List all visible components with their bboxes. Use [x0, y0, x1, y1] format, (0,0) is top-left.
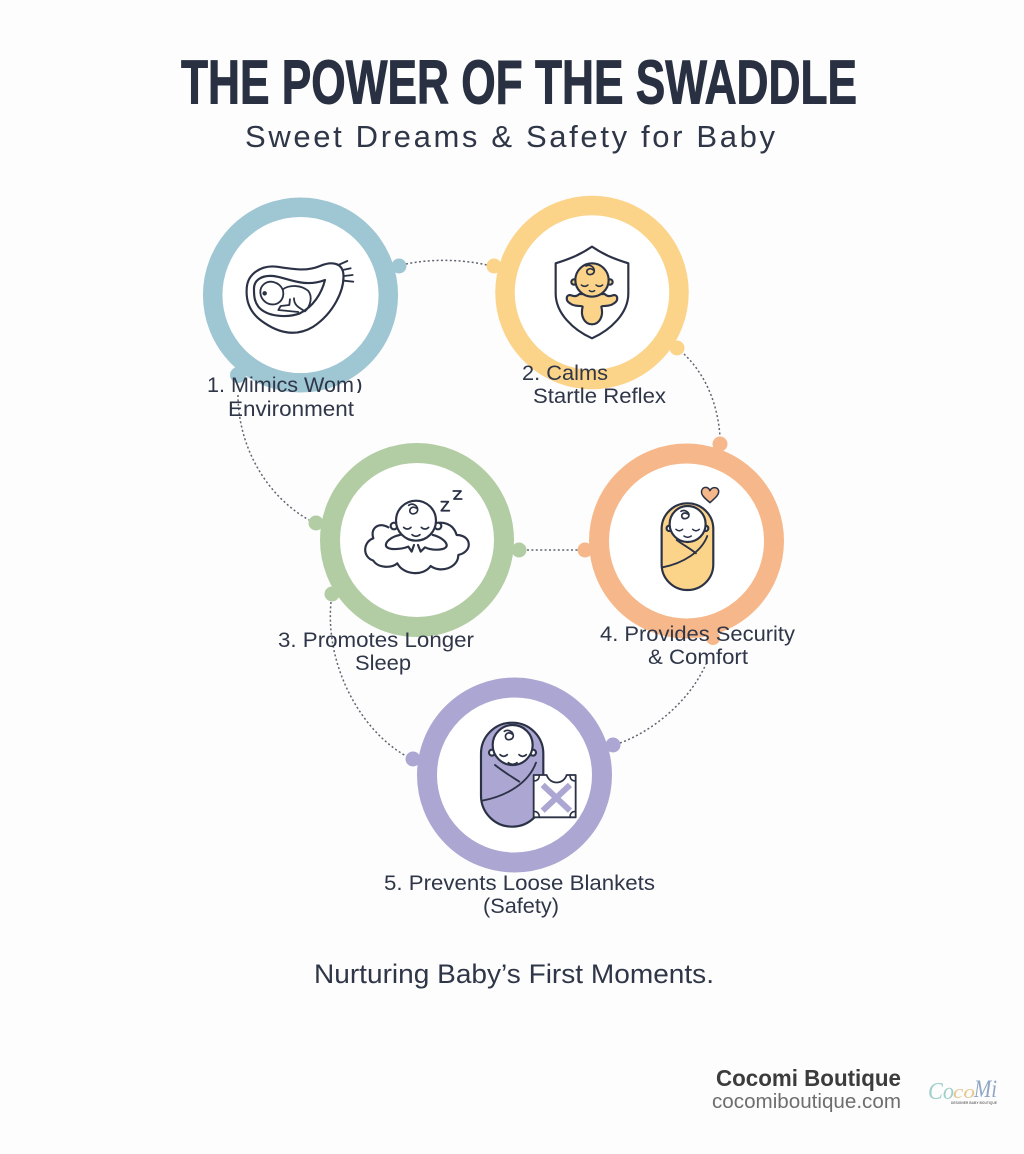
- label 5: (Safety): [483, 894, 559, 918]
- label 3: Sleep: [355, 651, 411, 675]
- label 1: 1. Mimics Wom: [207, 373, 354, 397]
- icon: swaddled baby with crossed-out blanket: [481, 723, 576, 827]
- connector: 3 to 5: [330, 602, 406, 756]
- label 2: [522, 361, 666, 408]
- connector: 3 to 4: [527, 549, 578, 551]
- ring 2: yellow: [486, 206, 684, 380]
- ring 5: purple: [406, 688, 620, 862]
- label 5: [384, 871, 655, 918]
- label 1: [207, 373, 362, 421]
- ring 4: orange: [578, 436, 774, 645]
- ring 3: green: [308, 453, 526, 627]
- label 3: [278, 628, 474, 675]
- label 3: 3. Promotes Longer: [278, 628, 474, 652]
- connector: 1 to 2: [406, 260, 487, 265]
- label 4: 4. Provides Security: [600, 622, 795, 646]
- icon: baby in womb: [247, 261, 353, 333]
- logo: Mi: [973, 1076, 997, 1103]
- label 2: 2. Calms: [522, 361, 608, 385]
- label 5: 5. Prevents Loose Blankets: [384, 871, 655, 895]
- logo: [928, 1076, 998, 1105]
- logo: Co: [928, 1079, 954, 1105]
- ring 1: blue: [213, 207, 406, 383]
- brand name: Cocomi Boutique: [716, 1065, 901, 1091]
- tagline: Nurturing Baby’s First Moments.: [314, 959, 714, 989]
- icon: swaddled baby with heart: [662, 487, 719, 590]
- brand website: cocomiboutique.com: [712, 1091, 901, 1113]
- label 4: [600, 622, 795, 669]
- label 1: Environment: [228, 397, 354, 421]
- connector: 1 to 3: [238, 395, 309, 520]
- icon: baby in shield: [556, 247, 628, 338]
- label 2: Startle Reflex: [533, 384, 666, 408]
- connector: 4 to 5: [620, 664, 706, 743]
- label 4: & Comfort: [648, 645, 748, 669]
- connector: 2 to 4: [684, 354, 720, 437]
- label 1: ): [357, 377, 362, 394]
- logo: co: [953, 1082, 975, 1103]
- subtitle: Sweet Dreams & Safety for Baby: [245, 119, 776, 154]
- logo: DESIGNER BABY BOUTIQUE: [951, 1101, 998, 1105]
- icon: baby sleeping on cloud: [365, 491, 469, 573]
